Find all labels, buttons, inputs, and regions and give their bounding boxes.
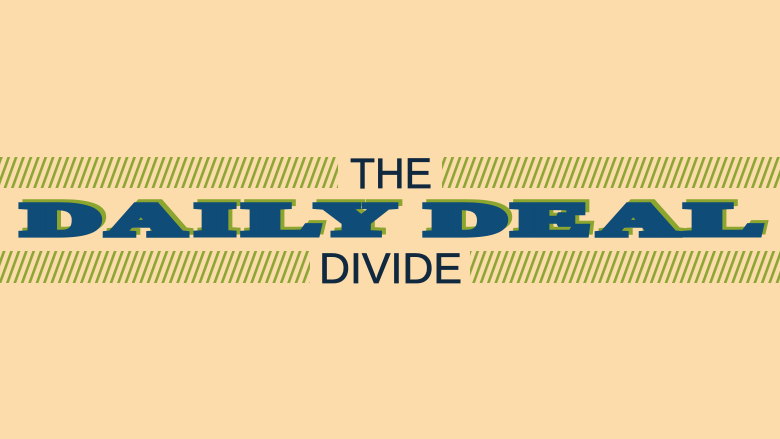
heading: DAILY DEAL: L	[687, 195, 762, 245]
heading shadow: DAILY DEAL green offset	[27, 192, 766, 242]
heading shadow: DAILY DEAL green offset: Y	[321, 192, 398, 242]
heading: DAILY DEAL: A	[108, 195, 185, 245]
heading: DAILY DEAL: L	[245, 195, 320, 245]
heading shadow: DAILY DEAL green offset: D	[431, 192, 511, 242]
heading shadow: DAILY DEAL green offset: A	[604, 192, 682, 242]
hatched band: top right	[442, 157, 780, 188]
hatched band: top left	[0, 157, 338, 188]
heading: DAILY DEAL: I	[196, 195, 234, 245]
heading shadow: DAILY DEAL green offset: E	[518, 192, 593, 242]
heading shadow: DAILY DEAL green offset: D	[27, 192, 105, 242]
heading: THE: THE	[350, 150, 432, 198]
heading: DAILY DEAL: E	[514, 195, 589, 245]
heading: DAILY DEAL: Y	[317, 195, 394, 245]
hatched band: bottom right	[470, 251, 780, 283]
heading: DAILY DEAL: A	[600, 195, 678, 245]
heading shadow: DAILY DEAL green offset: I	[200, 192, 238, 242]
hatched band: bottom left	[0, 251, 310, 283]
heading shadow: DAILY DEAL green offset: A	[112, 192, 189, 242]
heading: DAILY DEAL: D	[427, 195, 507, 245]
heading shadow: DAILY DEAL green offset: L	[691, 192, 766, 242]
heading: DAILY DEAL: D	[23, 195, 101, 245]
heading shadow: DAILY DEAL green offset: L	[249, 192, 324, 242]
heading: DAILY DEAL	[23, 195, 762, 245]
heading: DIVIDE: DIVIDE	[319, 245, 462, 293]
